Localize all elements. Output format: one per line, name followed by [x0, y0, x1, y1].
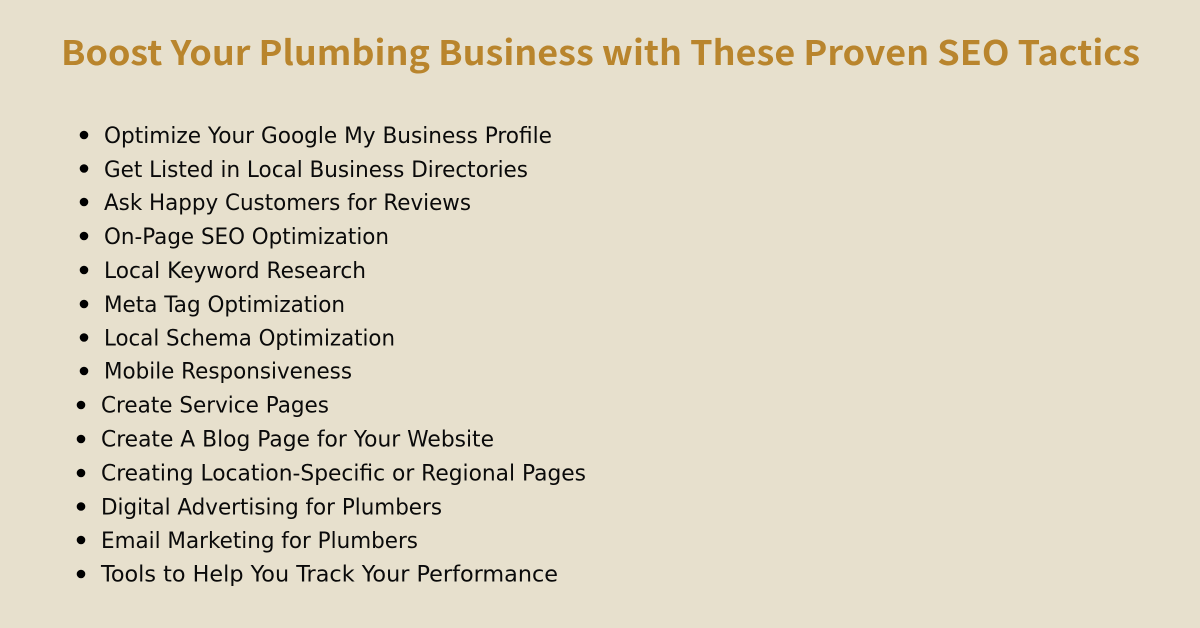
- item 2: Get Listed in Local Business Directories: [104, 157, 528, 183]
- item 5: Local Keyword Research: [104, 258, 366, 284]
- item 8: Mobile Responsiveness: [104, 358, 352, 384]
- item 10: Create A Blog Page for Your Website: [101, 426, 494, 452]
- item 14: Tools to Help You Track Your Performance: [100, 562, 558, 588]
- item 1: Optimize Your Google My Business Profile: [104, 123, 552, 149]
- item 9: Create Service Pages: [101, 392, 329, 418]
- bullet list: [77, 123, 586, 588]
- item 6: Meta Tag Optimization: [104, 292, 345, 318]
- item 7: Local Schema Optimization: [104, 326, 395, 352]
- title: Boost Your Plumbing Business with These Proven SEO Tactics: [61, 26, 1140, 75]
- item 3: Ask Happy Customers for Reviews: [104, 190, 471, 216]
- item 12: Digital Advertising for Plumbers: [101, 494, 442, 520]
- item 13: Email Marketing for Plumbers: [101, 528, 418, 554]
- item 11: Creating Location-Specific or Regional Pages: [101, 460, 586, 486]
- item 4: On-Page SEO Optimization: [104, 224, 389, 250]
